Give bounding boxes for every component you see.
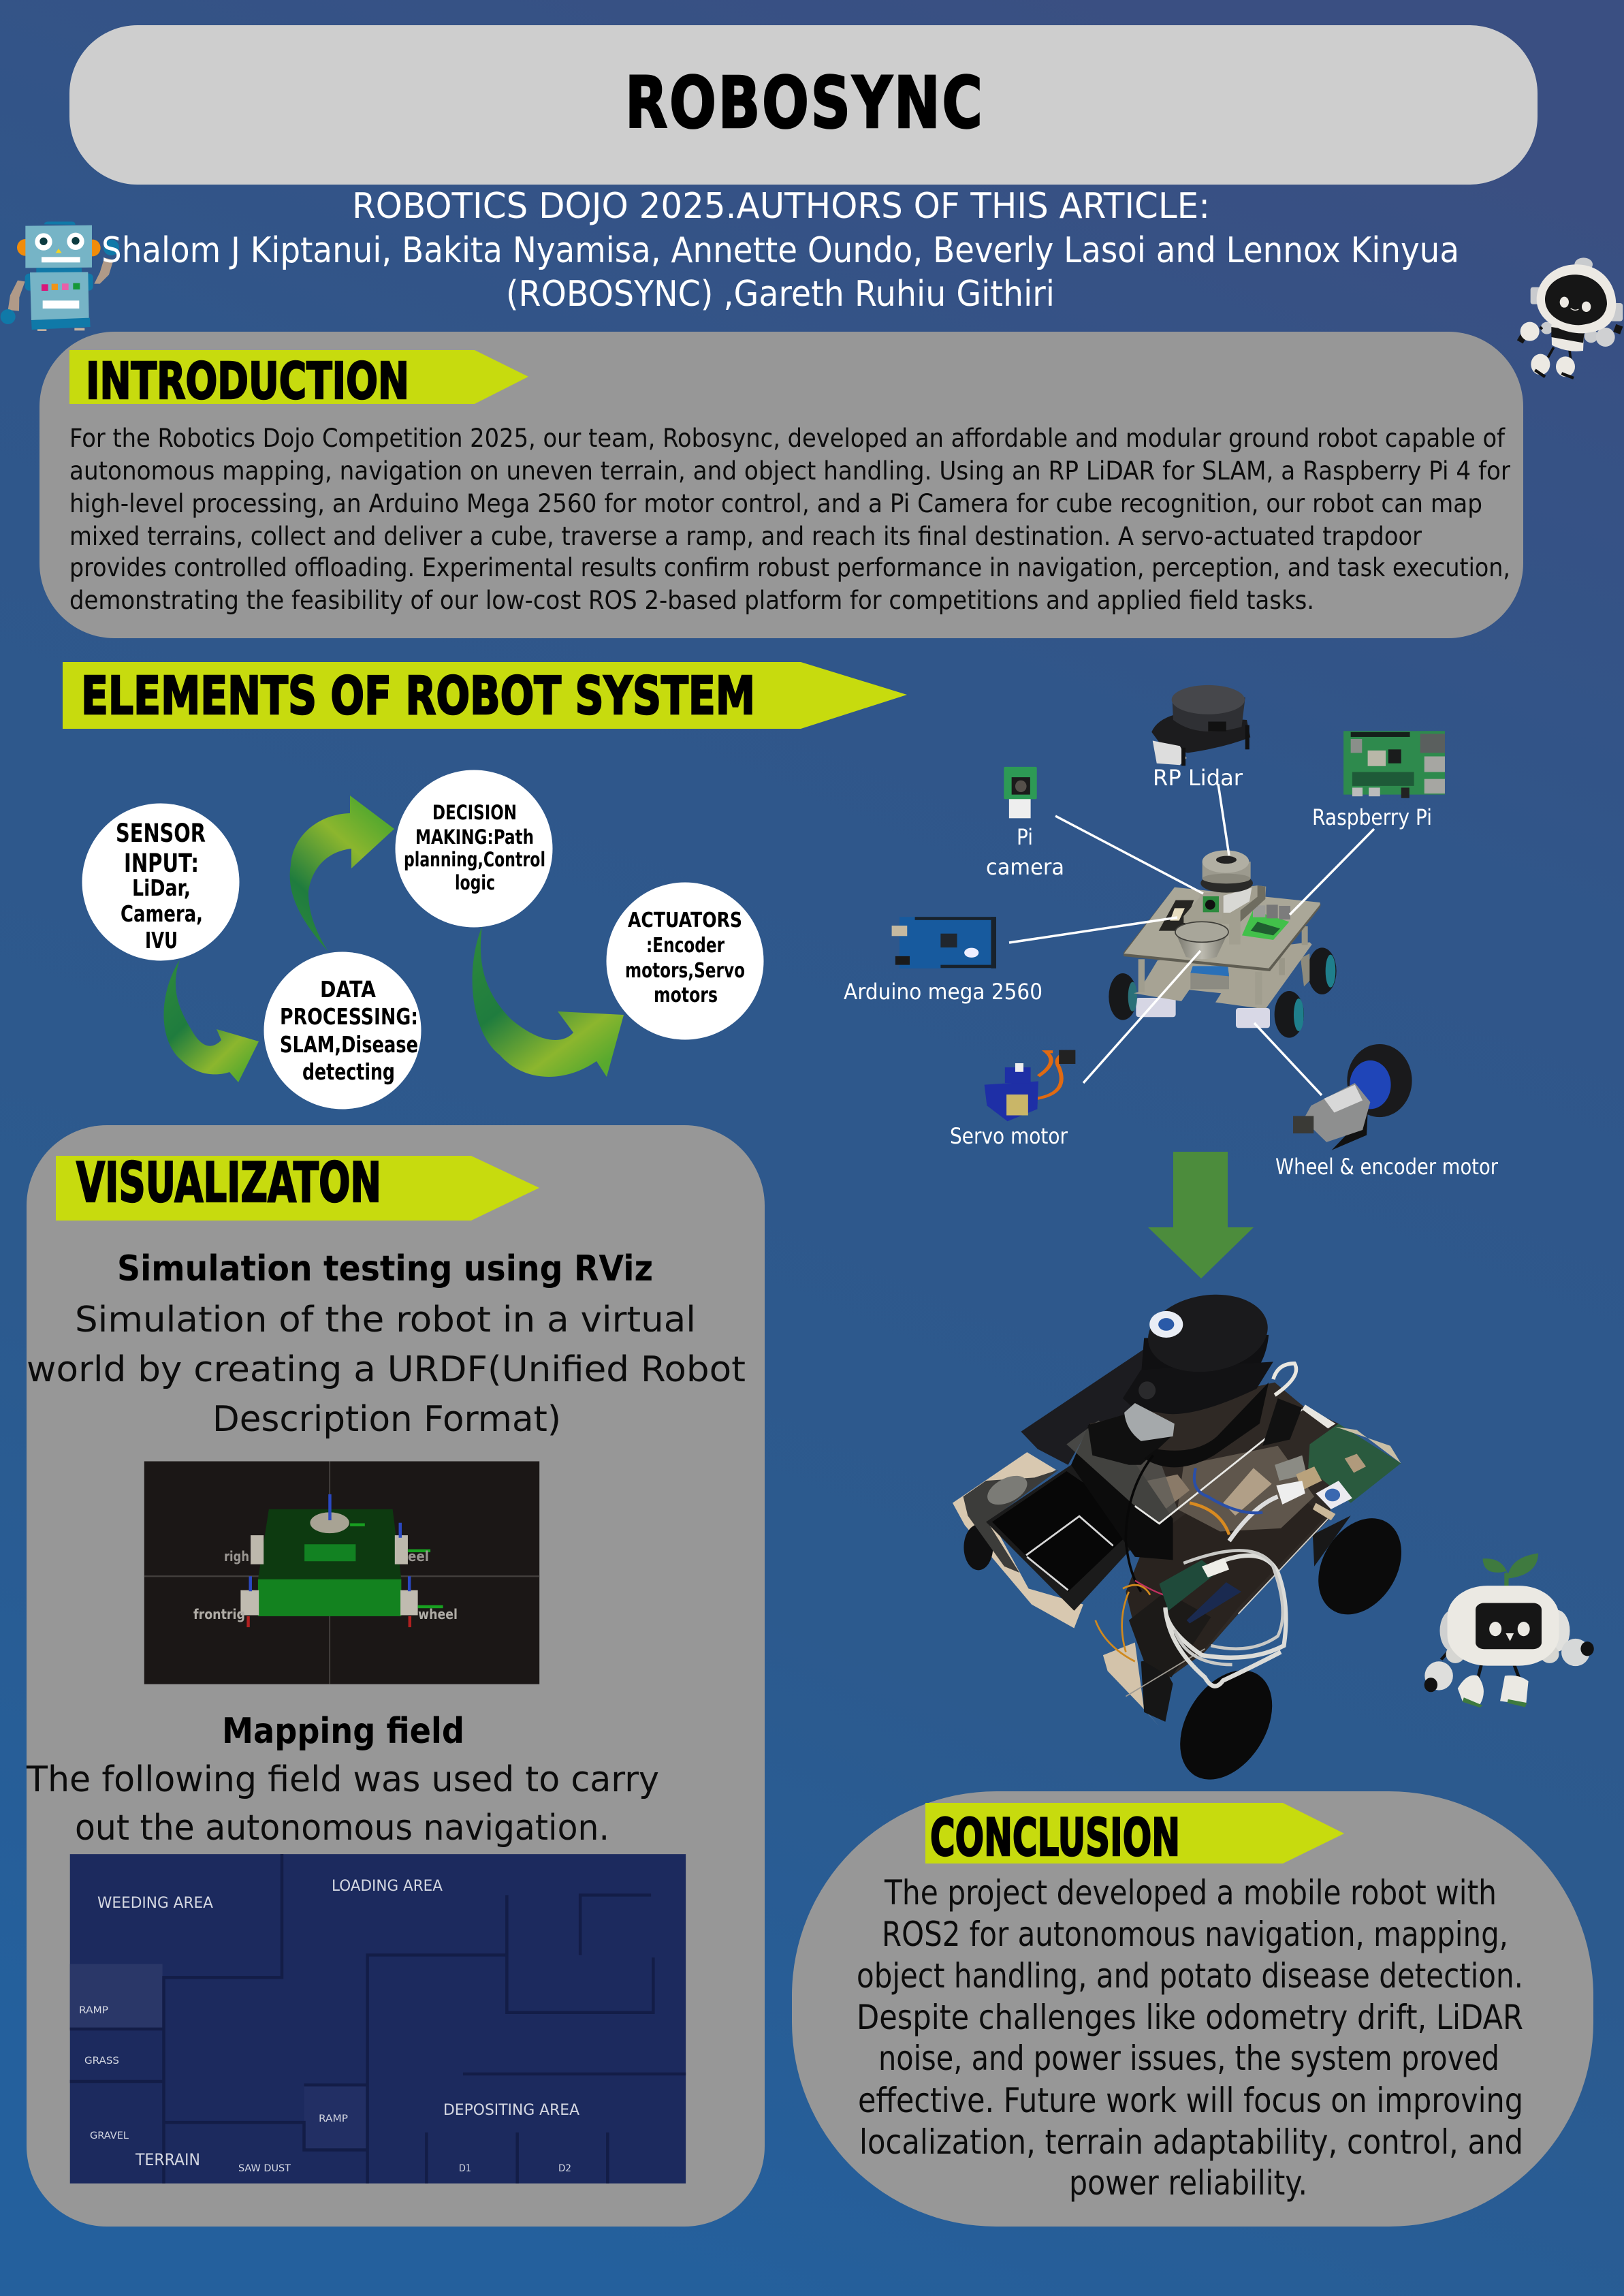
authors text block: Shalom J Kiptanui, Bakita Nyamisa, Annette Oundo, Beverly Lasoi and Lennox Kinyua <box>101 230 1459 271</box>
arrows: component leader lines <box>1009 784 1374 1095</box>
arrow: green down arrow <box>1148 1152 1254 1278</box>
component labels: Wheel & encoder motor <box>1275 1154 1499 1180</box>
authors text block <box>101 186 1459 315</box>
map: autonomous navigation field: GRASS <box>84 2056 119 2066</box>
icon: blue robot mascot <box>1 221 119 331</box>
icon: astronaut robot mascot <box>1517 257 1623 378</box>
conclusion body text: localization, terrain adaptability, control, and <box>859 2122 1523 2162</box>
simulation text block: world by creating a URDF(Unified Robot <box>27 1349 746 1390</box>
node: data processing: PROCESSING: <box>280 1003 418 1030</box>
introduction body text: For the Robotics Dojo Competition 2025, our team, Robosync, developed an affordable and modular ground robot capable of <box>69 424 1506 453</box>
simulation text block: Simulation of the robot in a virtual <box>75 1300 696 1340</box>
component labels: camera <box>986 854 1064 880</box>
photo: assembled robot <box>953 1287 1418 1797</box>
icon: pi camera <box>1004 767 1037 818</box>
map: autonomous navigation field: TERRAIN <box>135 2150 200 2169</box>
introduction body text: autonomous mapping, navigation on uneven terrain, and object handling. Using an RP LiDAR for SLAM, a Raspberry Pi 4 for <box>69 456 1511 486</box>
map: autonomous navigation field: D1 <box>459 2163 471 2174</box>
icon: RP lidar <box>1151 685 1250 766</box>
node: sensor input: LiDar, <box>132 875 191 901</box>
conclusion body text: power reliability. <box>1069 2163 1307 2203</box>
conclusion body text <box>857 1873 1523 2203</box>
mapping field text block: out the autonomous navigation. <box>75 1808 609 1849</box>
introduction body text: provides controlled offloading. Experimental results confirm robust performance in navigation, perception, and task execution, <box>69 553 1510 582</box>
arrow: data to decision <box>290 796 394 952</box>
map: autonomous navigation field: SAW DUST <box>238 2163 291 2174</box>
visualization heading: VISUALIZATON <box>76 1151 381 1214</box>
map: autonomous navigation field: WEEDING AREA <box>97 1895 213 1912</box>
panel: visualization <box>26 1125 765 2227</box>
screenshot: RViz simulation: frontrig <box>193 1606 245 1622</box>
title text: ROBOSYNC <box>625 61 983 144</box>
simulation text block: Simulation testing using RViz <box>117 1248 653 1289</box>
node: sensor input: SENSOR <box>116 819 206 848</box>
conclusion body text: effective. Future work will focus on improving <box>858 2081 1523 2120</box>
node: decision making: DECISION <box>432 801 517 824</box>
screenshot: RViz simulation: righ <box>224 1548 249 1564</box>
conclusion banner <box>925 1803 1344 1868</box>
node: data processing: DATA <box>320 976 376 1003</box>
introduction heading: INTRODUCTION <box>86 352 409 411</box>
icon: arduino mega <box>892 917 996 969</box>
screenshot: RViz simulation <box>144 1461 539 1684</box>
map: autonomous navigation field: GRAVEL <box>90 2130 129 2141</box>
component labels: RP Lidar <box>1153 765 1243 791</box>
component labels <box>844 765 1499 1180</box>
screenshot: RViz simulation: eel <box>408 1548 429 1564</box>
node: actuators: motors <box>654 984 718 1007</box>
node: actuators: ACTUATORS <box>628 909 742 932</box>
panel: components diagram <box>844 685 1499 1180</box>
robot chassis backdrop <box>1089 1383 1339 1680</box>
introduction body text: mixed terrains, collect and deliver a cube, traverse a ramp, and reach its final destination. A servo-actuated trapdoor <box>69 522 1422 551</box>
icon: servo motor <box>985 1050 1075 1121</box>
simulation text block: Description Format) <box>212 1399 561 1440</box>
node: actuators: motors,Servo <box>625 959 745 983</box>
mapping field text block <box>26 1711 659 1849</box>
node: sensor input: INPUT: <box>124 849 199 878</box>
node: data processing <box>264 952 421 1109</box>
component labels: Servo motor <box>950 1123 1068 1149</box>
node: decision making <box>395 770 553 928</box>
introduction body text <box>69 424 1511 615</box>
introduction body text: high-level processing, an Arduino Mega 2560 for motor control, and a Pi Camera for cube recognition, our robot can map <box>69 489 1482 518</box>
component labels: Raspberry Pi <box>1312 804 1432 830</box>
elements heading: ELEMENTS OF ROBOT SYSTEM <box>81 666 755 727</box>
visualization banner <box>56 1151 539 1221</box>
node: data processing: detecting <box>302 1058 395 1085</box>
introduction body text: demonstrating the feasibility of our low-cost ROS 2-based platform for competitions and applied field tasks. <box>69 586 1314 615</box>
flow diagram: robot system elements <box>82 770 764 1109</box>
simulation text block <box>27 1248 746 1440</box>
conclusion body text: ROS2 for autonomous navigation, mapping, <box>882 1915 1508 1954</box>
node: data processing: SLAM,Disease <box>280 1031 418 1058</box>
title banner <box>69 25 1538 185</box>
introduction banner <box>69 350 528 411</box>
map: autonomous navigation field: D2 <box>558 2163 571 2174</box>
panel: introduction <box>39 332 1523 638</box>
icon: plant robot mascot <box>1424 1553 1594 1708</box>
conclusion body text: Despite challenges like odometry drift, LiDAR <box>857 1998 1523 2037</box>
node: decision making: planning,Control <box>404 848 545 871</box>
mapping field text block: The following field was used to carry <box>26 1759 659 1800</box>
screenshot: RViz simulation: wheel <box>418 1606 458 1622</box>
map: autonomous navigation field: DEPOSITING AREA <box>443 2102 579 2119</box>
map: autonomous navigation field: LOADING AREA <box>332 1878 443 1895</box>
icon: raspberry pi <box>1343 731 1445 798</box>
node: sensor input <box>82 804 240 960</box>
authors text block: ROBOTICS DOJO 2025.AUTHORS OF THIS ARTICLE: <box>352 186 1210 227</box>
map: autonomous navigation field <box>70 1854 686 2184</box>
map: autonomous navigation field: RAMP <box>79 2005 108 2016</box>
arrow: sensor to data <box>163 960 259 1082</box>
conclusion body text: noise, and power issues, the system proved <box>878 2039 1499 2078</box>
node: decision making: logic <box>455 871 495 894</box>
arrow: decision to actuators <box>473 926 624 1077</box>
node: actuators <box>606 883 764 1039</box>
panel: conclusion <box>792 1791 1593 2227</box>
node: sensor input: Camera, <box>121 900 203 927</box>
authors text block: (ROBOSYNC) ,Gareth Ruhiu Githiri <box>506 274 1055 315</box>
node: actuators: :Encoder <box>646 934 725 958</box>
icon: wheel and encoder motor <box>1293 1044 1412 1150</box>
elements of robot system banner <box>63 662 907 729</box>
mapping field text block: Mapping field <box>222 1711 464 1752</box>
component labels: Pi <box>1017 824 1033 850</box>
conclusion body text: The project developed a mobile robot with <box>884 1873 1497 1913</box>
conclusion heading: CONCLUSION <box>930 1807 1180 1868</box>
node: sensor input: IVU <box>145 927 178 954</box>
node: decision making: MAKING:Path <box>415 825 534 849</box>
map: autonomous navigation field: RAMP <box>319 2113 348 2124</box>
icon: CAD robot assembly <box>1109 850 1337 1038</box>
component labels: Arduino mega 2560 <box>844 979 1042 1005</box>
